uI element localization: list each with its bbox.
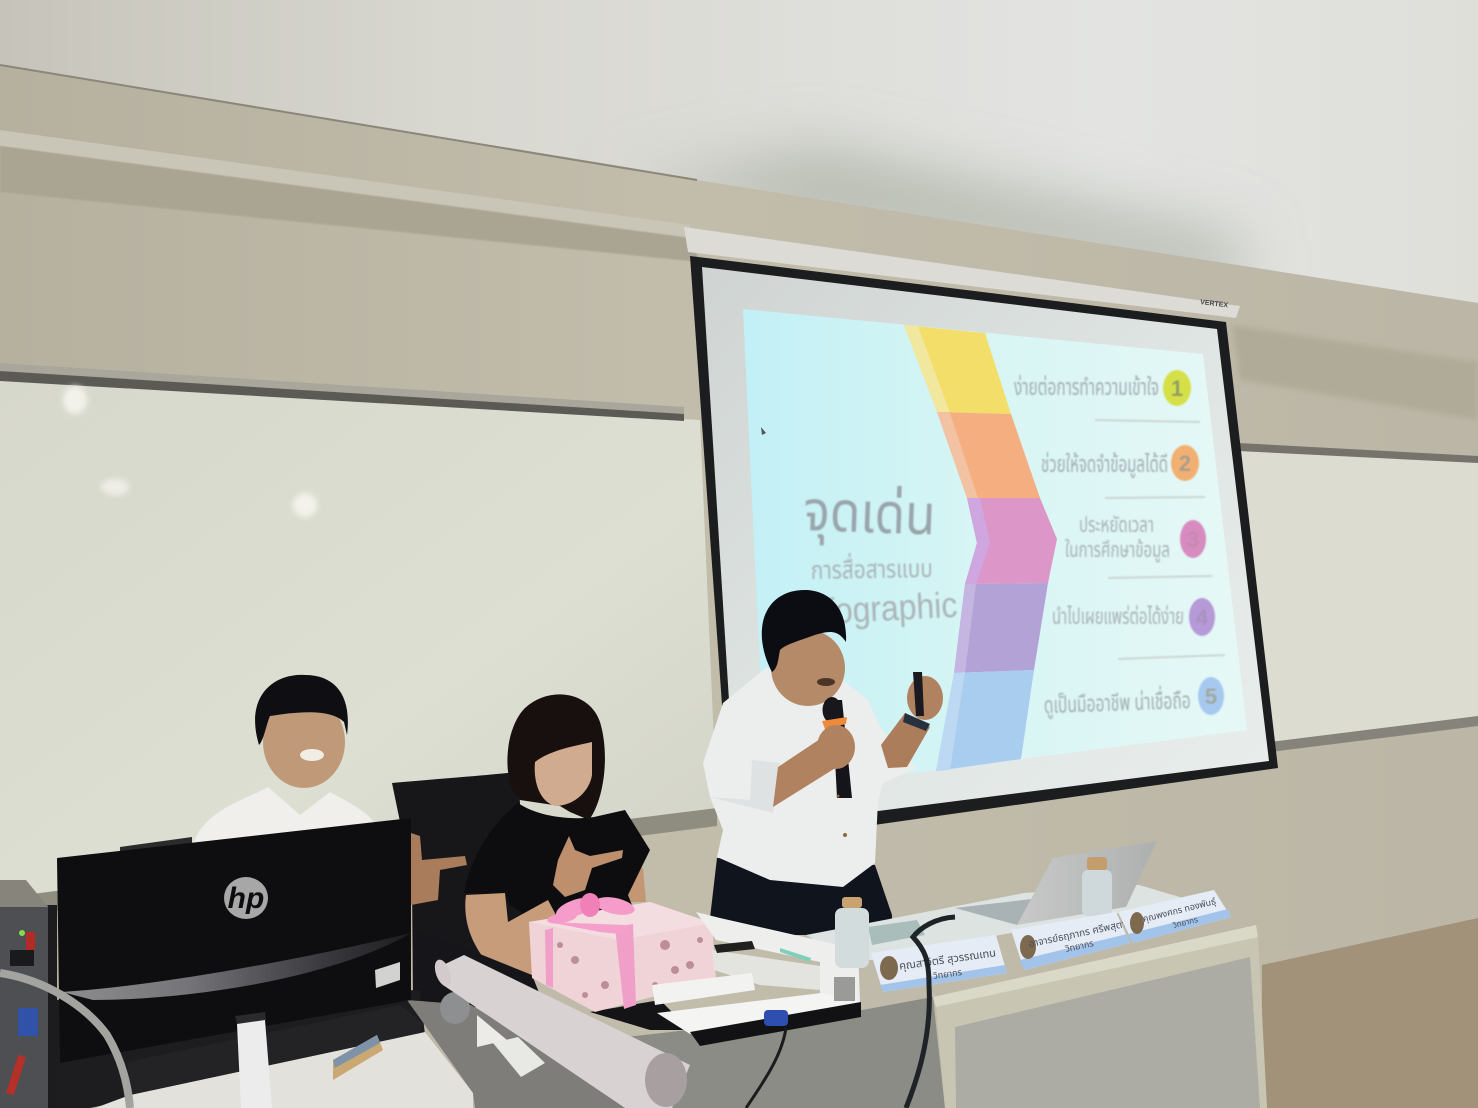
item 5: [1043, 677, 1224, 720]
item 2: [1041, 445, 1199, 481]
presenter shirt: [703, 667, 917, 887]
item 1: 1: [1171, 376, 1183, 401]
floor: [1262, 918, 1478, 1108]
monitor stand: [235, 1012, 272, 1108]
paper sheet on table: [477, 1015, 507, 1047]
name card 3: [1118, 890, 1231, 943]
item 5: ดูเป็นมืออาชีพ น่าเชื่อถือ: [1043, 684, 1191, 720]
slide title: จุดเด่น: [803, 479, 937, 549]
presenter left forearm: [773, 737, 837, 807]
seated woman: [464, 694, 650, 978]
presenter moustache: [817, 678, 835, 686]
gift box: [529, 893, 716, 1012]
item 3: 3: [1187, 527, 1199, 552]
water bottle right: [1082, 857, 1112, 916]
man pointing hand: [411, 833, 467, 905]
brand label: VERTEX: [1200, 299, 1229, 309]
keyboard: [127, 1005, 423, 1095]
monitor: [57, 818, 411, 1063]
dark clutter behind and below monitor: [50, 990, 425, 1108]
item 2: ช่วยให้จดจำข้อมูลได้ดี: [1041, 451, 1168, 479]
blue connector: [764, 1010, 788, 1026]
shirt buttons: [836, 794, 847, 837]
presenter: [703, 590, 943, 935]
woman body: [464, 803, 650, 925]
name card 1: [871, 935, 1007, 992]
name card 2: อาจารย์ธฤภากร ศรีพสุตา: [1027, 918, 1127, 950]
camera green tab: [780, 948, 811, 962]
presenter trousers: [708, 858, 892, 935]
presenter right forearm: [881, 713, 930, 768]
slide pointer speck: [761, 427, 766, 435]
slide title: Infographic: [798, 584, 958, 633]
name card 2: [1011, 912, 1130, 970]
item 3: ประหยัดเวลา: [1079, 514, 1154, 537]
microphone orange band: [822, 717, 847, 729]
camera base: [657, 993, 858, 1034]
dark area behind roll: [413, 930, 540, 1008]
microphone: [832, 700, 852, 798]
monitor glossy band: [62, 933, 411, 1000]
chevron: yellow: [904, 325, 1011, 414]
camera flat surface: [712, 950, 820, 990]
man hair: [255, 675, 348, 745]
camera black connector strip: [690, 1002, 861, 1046]
chevron: pink: [965, 498, 1057, 584]
name card 1: คุณสาวิตรี สุวรรณเทน: [898, 947, 997, 973]
table frame: [936, 937, 1267, 1108]
item 4: นำไปเผยแพร่ต่อได้ง่าย: [1052, 604, 1184, 629]
slide background: [743, 309, 1247, 792]
grey table edge: [407, 1000, 640, 1108]
name card 3: วิทยากร: [1171, 915, 1199, 930]
chevron: blue: [936, 670, 1034, 771]
black stand under gift: [590, 1000, 690, 1030]
hp logo: [224, 877, 268, 919]
woman left arm: [465, 893, 556, 978]
screen border: [690, 256, 1278, 845]
woman face: [535, 742, 592, 806]
chevron: orange: [937, 412, 1040, 498]
man shirt: [194, 787, 378, 845]
computer tower: [0, 880, 57, 1108]
item 5: 5: [1205, 684, 1217, 709]
presenter raised hand: [907, 676, 943, 720]
table top edge: [933, 925, 1258, 1007]
laptop: [955, 841, 1157, 925]
woman pointing hand: [553, 836, 623, 897]
item 4: [1052, 598, 1215, 636]
camera black label: [714, 941, 755, 953]
seated man: [194, 675, 378, 845]
name cards: [871, 890, 1231, 992]
black office chair: [392, 772, 530, 1000]
presenter hand on mic: [817, 725, 855, 769]
item 3: [1065, 514, 1206, 563]
ceiling: [0, 0, 1478, 320]
chevron: purple: [954, 583, 1048, 673]
camera lower arms: [652, 973, 755, 1005]
woman hair: [507, 694, 605, 820]
woman right arm: [625, 868, 646, 902]
name card 3: คุณพงศกร ทองพันธุ์: [1142, 896, 1217, 924]
document camera: [652, 912, 861, 1046]
gift bow: [546, 893, 636, 926]
desk surface behind name cards: [806, 885, 1190, 960]
table inner panel: [955, 957, 1260, 1108]
slide title: [798, 479, 958, 633]
desk-side dark object behind monitor: [120, 837, 192, 860]
left whiteboard: [0, 363, 717, 918]
item 2: 2: [1179, 451, 1191, 476]
slide title: การสื่อสารแบบ: [811, 551, 933, 585]
presenter wristband: [903, 713, 930, 731]
right whiteboard: [1238, 443, 1478, 753]
water bottle left: [835, 897, 869, 968]
paper roll: [432, 955, 690, 1108]
slide list: [1014, 370, 1225, 720]
ceiling edge line: [0, 65, 697, 180]
man smile: [300, 749, 324, 761]
tablet on desk: [868, 920, 925, 945]
white table left: [95, 1032, 473, 1108]
monitor back: [57, 818, 411, 1063]
camera grey label: [834, 977, 855, 1001]
eraser: [333, 1035, 383, 1080]
item 1: [1014, 370, 1191, 406]
microphone on table: [440, 992, 470, 1024]
hp logo: hp: [228, 882, 264, 915]
screen surface: [702, 267, 1269, 829]
rolled sleeve shadow: [710, 760, 780, 813]
item 3: ในการศึกษาข้อมูล: [1065, 538, 1170, 563]
remote control: [493, 1037, 545, 1077]
camera arm: [696, 912, 860, 1003]
clicker remote: [913, 672, 924, 716]
name card 1: วิทยากร: [932, 967, 963, 981]
thin cable: [746, 1028, 786, 1108]
name card 2: วิทยากร: [1064, 938, 1095, 954]
gooseneck lamp: [0, 973, 130, 1108]
item 1: ง่ายต่อการทำความเข้าใจ: [1014, 374, 1159, 400]
presenter face: [771, 630, 845, 706]
right table, left grey part: [600, 997, 945, 1108]
screen housing: [684, 227, 1240, 318]
monitor sticker: [375, 962, 400, 988]
black cable: [906, 917, 955, 1108]
projector screen: [684, 227, 1278, 845]
item 4: 4: [1196, 605, 1209, 630]
man face: [263, 696, 345, 788]
presenter hair: [762, 590, 846, 672]
right table: [933, 925, 1267, 1108]
